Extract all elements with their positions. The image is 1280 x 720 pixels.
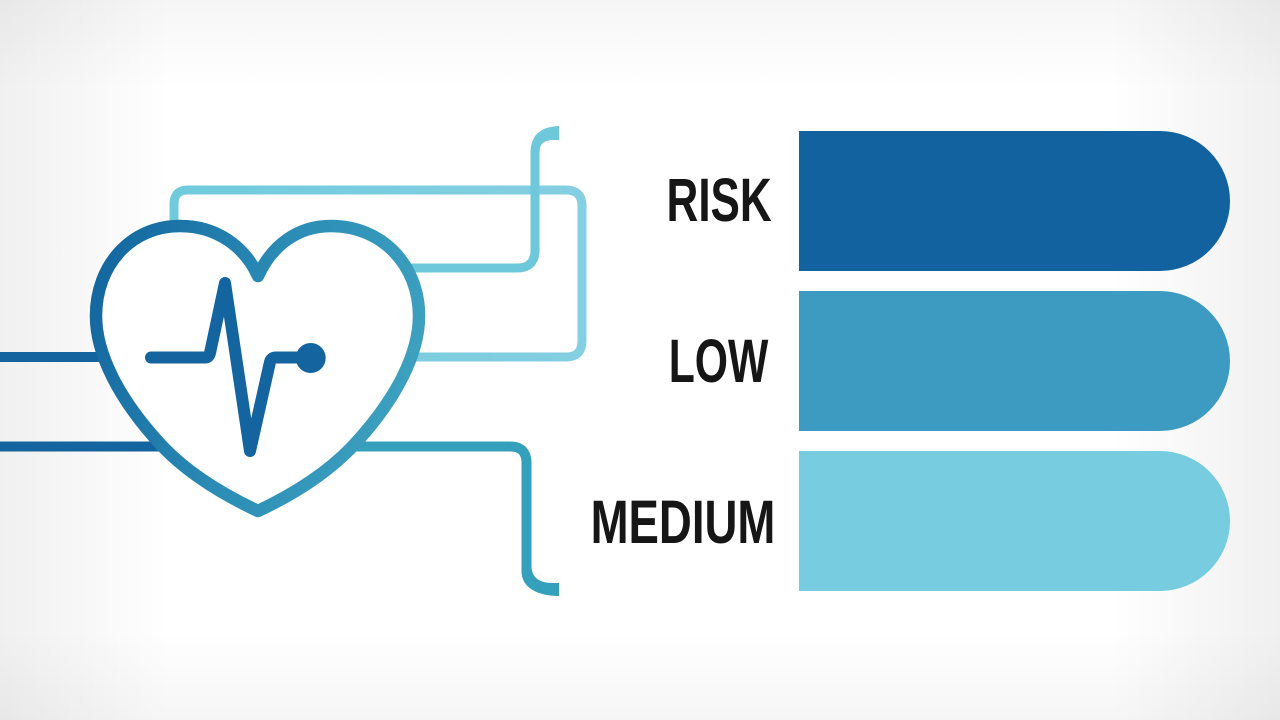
bar: medium bbox=[799, 451, 1230, 591]
bar: low bbox=[799, 291, 1230, 431]
label: risk: RISK bbox=[667, 166, 772, 234]
bar: risk bbox=[799, 131, 1230, 271]
circuit lines: left inputs bbox=[0, 357, 175, 446]
circuit line: top loop bbox=[174, 190, 582, 357]
label: low: LOW bbox=[669, 327, 768, 395]
circuit line: upper right hook bbox=[405, 126, 559, 268]
icon: pulse line bbox=[151, 283, 326, 451]
circuit line: lower right hook bbox=[340, 446, 559, 596]
label: medium: MEDIUM bbox=[590, 488, 775, 556]
icon: heart outline bbox=[96, 226, 419, 511]
